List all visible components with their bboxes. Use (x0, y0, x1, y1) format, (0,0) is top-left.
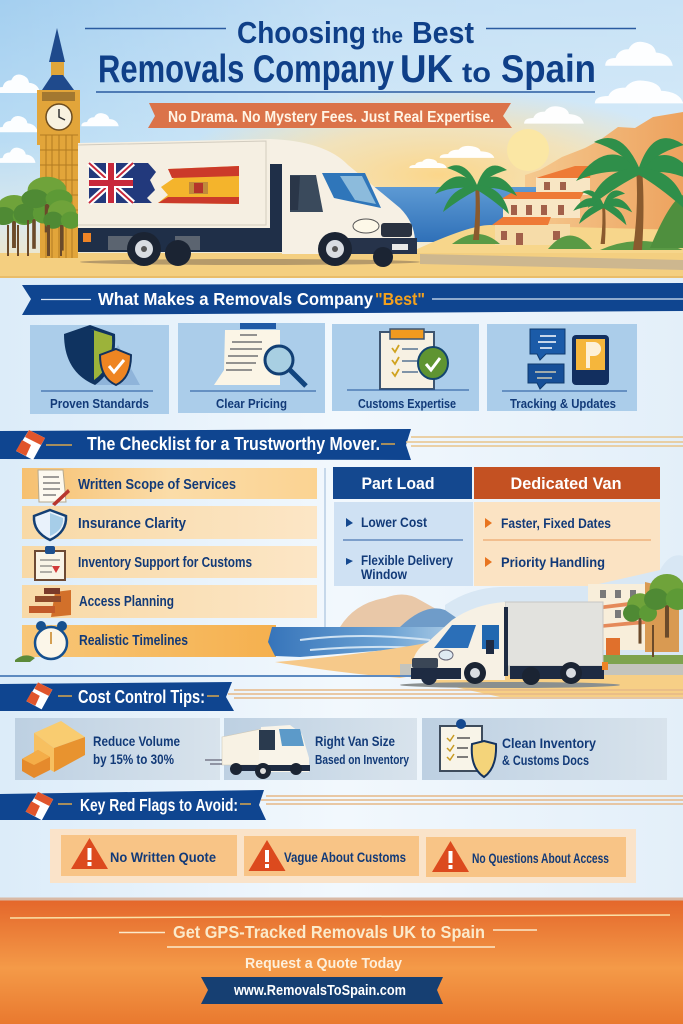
column: part load: Window (361, 566, 407, 582)
section band: what makes a removals company best: "Best" (375, 289, 425, 309)
row: access planning (22, 585, 317, 618)
cta subheading: Request a Quote Today (245, 956, 402, 972)
flag: vague about customs: Vague About Customs (284, 849, 406, 865)
header: dedicated van: Dedicated Van (510, 475, 622, 493)
panel: cost tips (15, 718, 667, 780)
title: Spain (501, 48, 596, 91)
flag: vague about customs (244, 836, 419, 876)
title: Best (412, 15, 474, 50)
section band: key red flags: Key Red Flags to Avoid: (80, 795, 238, 815)
ground (400, 655, 683, 697)
tip: clean inventory: Clean Inventory (502, 735, 596, 751)
header: part load (333, 467, 472, 499)
column: dedicated van: Priority Handling (501, 554, 605, 570)
tagline ribbon: No Drama. No Mystery Fees. Just Real Expertise. (168, 109, 494, 126)
section band: checklist (0, 429, 683, 460)
row: realistic timelines: Realistic Timelines (79, 633, 188, 649)
Big Ben (37, 28, 80, 258)
row: inventory support: Inventory Support for Customs (78, 555, 252, 571)
panel: tracking and updates: Tracking & Updates (510, 396, 616, 411)
column: part load: Flexible Delivery (361, 552, 453, 568)
column: part load (334, 502, 473, 586)
section band: what makes a removals company best: What Makes a Removals Company (98, 289, 373, 309)
flag: no questions about access (426, 837, 626, 877)
url ribbon (201, 977, 443, 1004)
palm trees (435, 138, 683, 250)
title: the (372, 23, 403, 48)
row: written scope: Written Scope of Services (78, 477, 236, 493)
panel: proven standards (30, 325, 169, 414)
panel: proven standards: Proven Standards (50, 396, 149, 411)
flag: no questions about access: No Questions About Access (472, 850, 609, 866)
row: insurance (22, 506, 317, 540)
tip: reduce volume: Reduce Volume (93, 733, 180, 749)
title: Choosing (237, 15, 366, 50)
panel: tracking and updates (487, 324, 637, 411)
cta heading: Get GPS-Tracked Removals UK to Spain (173, 922, 485, 942)
row: insurance: Insurance Clarity (78, 516, 186, 532)
van (400, 602, 620, 688)
icon: shield (64, 325, 140, 385)
panel: clear pricing: Clear Pricing (216, 396, 287, 411)
row: realistic timelines (15, 621, 276, 662)
title (85, 15, 636, 92)
section band: checklist: The Checklist for a Trustworthy Mover. (87, 434, 380, 454)
spanish villas (492, 166, 592, 245)
title: to (462, 57, 491, 88)
tip: right van size (205, 718, 417, 780)
row: access planning: Access Planning (79, 594, 174, 610)
icon: magnifier on document (214, 323, 306, 386)
flag: no written quote: No Written Quote (110, 849, 216, 865)
clouds (0, 42, 683, 168)
title: UK (400, 48, 453, 91)
footer call to action (0, 899, 683, 1024)
title: Removals Company (98, 48, 394, 91)
tip: clean inventory: & Customs Docs (502, 753, 589, 768)
header: part load: Part Load (362, 475, 434, 493)
panel: customs expertise (332, 324, 479, 411)
section band: what makes a removals company best (22, 283, 683, 315)
trees (0, 177, 81, 256)
row: inventory support (22, 546, 317, 580)
trees (623, 574, 683, 657)
tip: clean inventory (422, 718, 667, 780)
icon: chat bubbles and phone (528, 329, 609, 389)
panel: customs expertise: Customs Expertise (358, 396, 456, 411)
tagline ribbon (148, 103, 512, 128)
icon: checklist tag (16, 430, 45, 460)
building (588, 582, 679, 656)
moving truck (78, 139, 420, 267)
panel: red flags (50, 829, 636, 883)
icon: clipboard with check (380, 329, 448, 389)
section band: cost control tips: Cost Control Tips: (78, 687, 205, 707)
header: dedicated van (474, 467, 660, 499)
hero illustration (0, 0, 683, 278)
panel: checklist rows (15, 468, 317, 662)
url ribbon: www.RemovalsToSpain.com (233, 983, 406, 999)
column: dedicated van: Faster, Fixed Dates (501, 515, 611, 531)
column: dedicated van (474, 502, 660, 586)
lower coastal scene with van (0, 555, 683, 697)
row: written scope (22, 468, 317, 506)
flag: no written quote (61, 835, 237, 876)
tip: right van size: Right Van Size (315, 733, 395, 749)
tip: right van size: Based on Inventory (315, 753, 409, 767)
flags on truck (89, 163, 239, 204)
comparison table (333, 467, 660, 586)
panel: clear pricing (178, 323, 325, 413)
section band: key red flags (0, 790, 683, 820)
column: part load: Lower Cost (361, 514, 427, 530)
tip: reduce volume: by 15% to 30% (93, 751, 174, 767)
section band: cost control tips (0, 682, 683, 711)
tip: reduce volume (15, 718, 220, 780)
